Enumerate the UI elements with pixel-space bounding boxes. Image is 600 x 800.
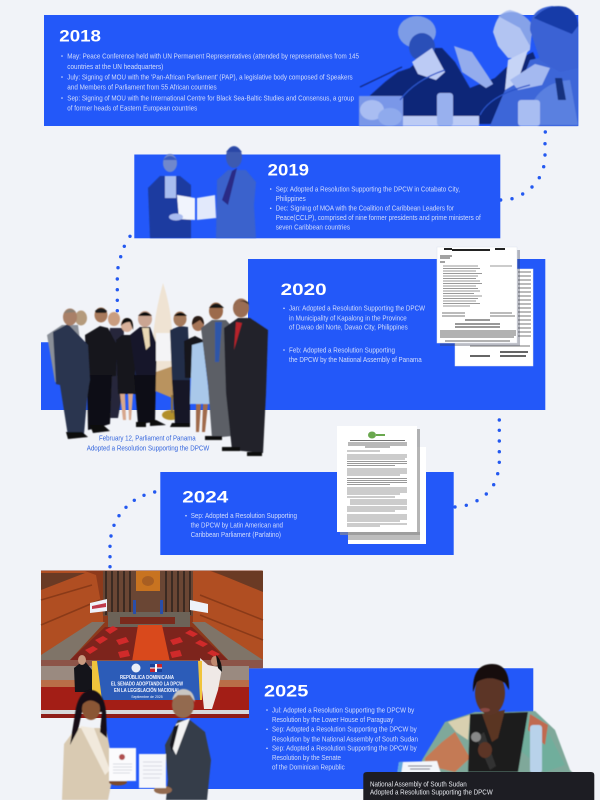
text block: 2020 events: of Davao del Norte, Davao City, Philippines — [289, 323, 408, 332]
text block: 2025 events: of the Dominican Republic — [272, 763, 345, 772]
text block: 2024 events: Caribbean Parliament (Parlatino) — [191, 530, 281, 539]
text block: 2020 events: Feb: Adopted a Resolution Supporting — [289, 345, 395, 354]
document stack: Parlatino resolution — [337, 426, 426, 544]
heading: 2024: 2024 — [182, 488, 229, 506]
document stack: 2020 resolutions — [437, 247, 533, 366]
banner: Senate adopting the DPCW — [92, 661, 202, 700]
text block: 2018 events — [61, 51, 359, 112]
dotted connector: 2024 to 2025 — [108, 490, 156, 568]
photo: group at Parliament of Panama — [47, 283, 268, 456]
heading: 2025: 2025 — [264, 683, 308, 701]
text block: 2024 events: Sep: Adopted a Resolution Supporting — [191, 511, 297, 520]
heading: 2020: 2020 — [281, 281, 327, 299]
text block: 2019 events: Dec: Signing of MOA with the Coalition of Caribbean Leaders for — [276, 204, 454, 213]
dotted connector: 2018 to 2019 — [499, 130, 547, 202]
text block: 2025 events: Sep: Adopted a Resolution Supporting the DPCW by — [272, 744, 417, 753]
text block: 2019 events: Peace(CCLP), comprised of nine former presidents and prime ministers of — [276, 213, 481, 222]
photo: conference panel in blue duotone — [359, 6, 578, 126]
panel: 2024 — [160, 426, 454, 555]
text block: 2025 events: Resolution by the National Assembly of South Sudan — [272, 734, 418, 743]
text block: 2018 events: Sep: Signing of MOU with the International Centre for Black Sea-Baltic Studies and Consensus, a group — [67, 93, 354, 102]
text block: 2018 events: of former heads of Eastern European countries — [67, 103, 198, 112]
photo: South Sudan speaker at desk — [397, 664, 575, 775]
text block: 2025 events: Resolution by the Lower House of Paraguay — [272, 715, 394, 724]
panel: 2018 — [44, 6, 578, 126]
text block: 2025 events: Jul: Adopted a Resolution Supporting the DPCW by — [272, 705, 415, 714]
text block: 2019 events: Philippines — [276, 194, 306, 203]
dotted connector: 2020 to 2024 — [453, 418, 501, 509]
text block: 2024 events: the DPCW by Latin American and — [191, 521, 283, 530]
panel: 2019 — [134, 146, 500, 238]
heading: 2018: 2018 — [59, 28, 101, 46]
dotted connector: 2019 to 2020 — [116, 235, 132, 312]
banner: Senate adopting the DPCW: REPÚBLICA DOMINICANA — [120, 674, 174, 681]
caption: Parliament of Panama: Adopted a Resolution Supporting the DPCW — [87, 443, 209, 452]
caption bar: National Assembly of South Sudan: National Assembly of South Sudan — [370, 779, 467, 788]
banner: Senate adopting the DPCW: Septiembre de 2025 — [131, 695, 163, 699]
text block: 2020 events: in Municipality of Kapalong in the Province — [289, 313, 407, 322]
text block: 2020 events: Jan: Adopted a Resolution Supporting the DPCW — [289, 304, 425, 313]
text block: 2019 events: seven Caribbean countries — [276, 223, 350, 232]
text block: 2025 events: Sep: Adopted a Resolution Supporting the DPCW by — [272, 725, 417, 734]
text block: 2018 events: and Members of Parliament from 55 African countries — [67, 83, 217, 92]
panel: 2020 — [41, 247, 545, 410]
heading: 2019: 2019 — [268, 162, 309, 180]
photo: Dominican Republic Senate chamber — [41, 570, 263, 718]
text block: 2019 events: Sep: Adopted a Resolution Supporting the DPCW in Cotabato City, — [276, 184, 460, 193]
caption: Parliament of Panama: February 12, Parliament of Panama — [99, 434, 196, 443]
text block: 2025 events: Resolution by the Senate — [272, 753, 341, 762]
photo: two officials holding documents — [62, 689, 211, 800]
text block: 2018 events: countries at the UN headquarters) — [67, 62, 163, 71]
text block: 2020 events — [283, 304, 425, 364]
caption bar: National Assembly of South Sudan — [363, 772, 594, 800]
caption: Parliament of Panama — [87, 434, 209, 452]
text block: 2024 events — [185, 511, 297, 539]
text block: 2018 events: July: Signing of MOU with the 'Pan-African Parliament' (PAP), a legislative body composed of Speakers — [67, 72, 353, 81]
photo: two men holding signed document — [148, 146, 256, 238]
text block: 2019 events — [270, 184, 481, 232]
caption bar: National Assembly of South Sudan: Adopted a Resolution Supporting the DPCW — [370, 788, 493, 797]
text block: 2020 events: the DPCW by the National Assembly of Panama — [289, 355, 422, 364]
banner: Senate adopting the DPCW: EL SENADO ADOPTANDO LA DPCW — [111, 682, 184, 688]
panel: 2025 — [102, 668, 533, 789]
text block: 2018 events: May: Peace Conference held with UN Permanent Representatives (attended by representatives from 145 — [67, 51, 359, 60]
text block: 2025 events — [266, 705, 418, 772]
banner: Senate adopting the DPCW: EN LA LEGISLACIÓN NACIONAL — [114, 686, 181, 694]
